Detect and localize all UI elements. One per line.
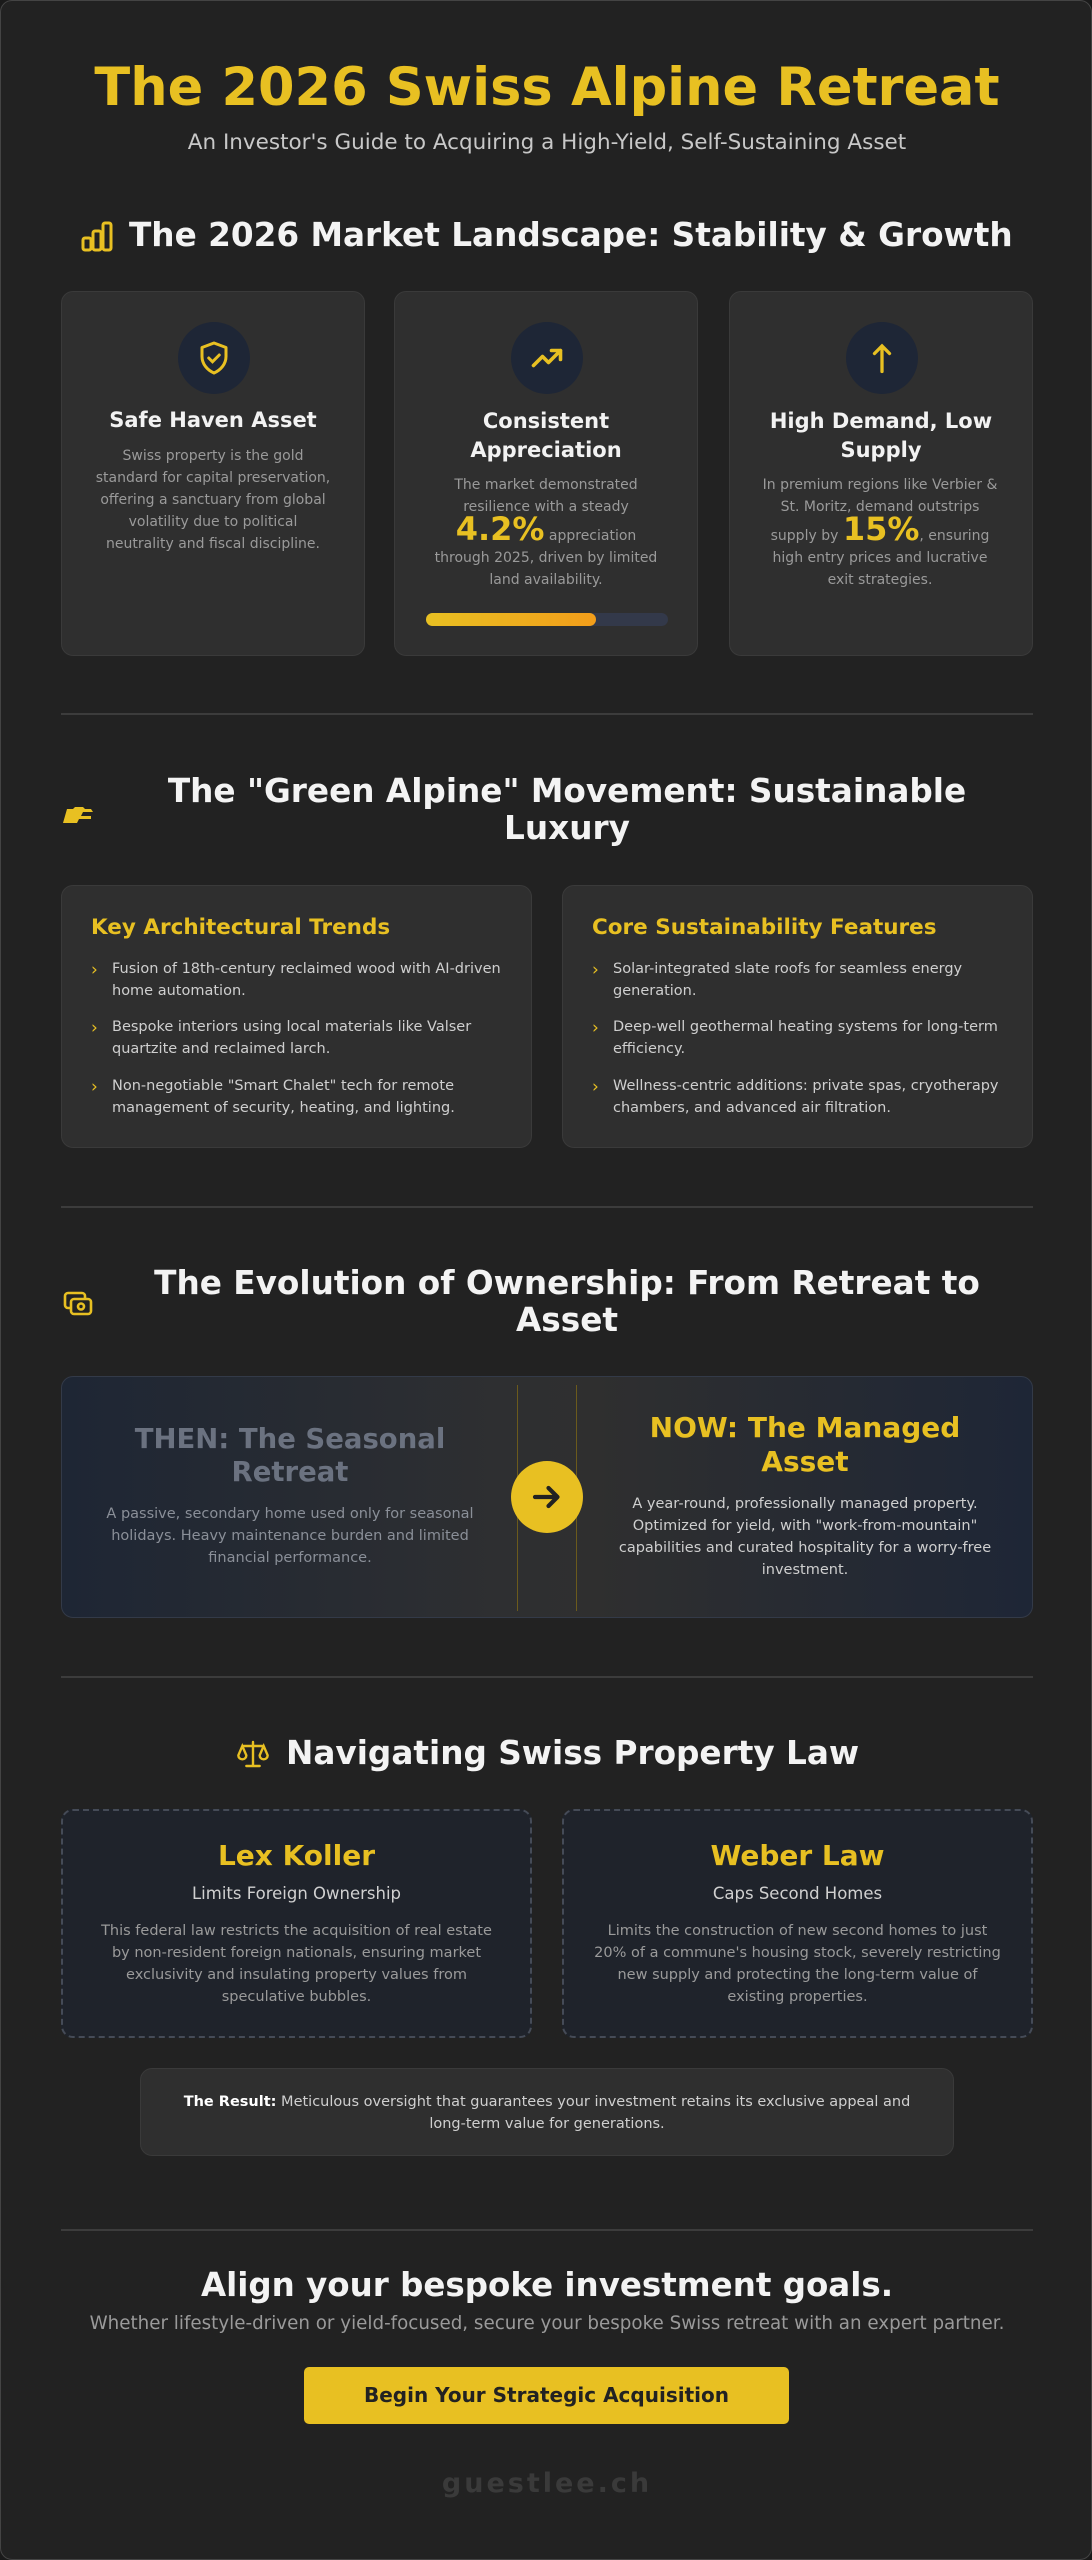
now: NOW: The Managed Asset (650, 1411, 960, 1478)
icon: arrow circle (511, 1461, 583, 1533)
section heading: evolution: Asset (516, 1301, 618, 1339)
section heading: evolution (64, 1264, 980, 1339)
panel: then vs now (61, 1376, 1033, 1618)
panel: sustainability features: Core Sustainability Features (592, 915, 937, 940)
section heading: green alpine: Luxury (504, 809, 630, 847)
card: safe haven (61, 291, 365, 656)
icon: shield (178, 322, 250, 394)
button (304, 2367, 789, 2424)
progress bar (426, 613, 668, 626)
card: demand: In premium regions like Verbier & St. Moritz, demand outstrips supply by 15%, ensuring high entry prices and lucrative exit strategies. (763, 477, 997, 588)
panel: sustainability features (562, 885, 1033, 1148)
icon: bar chart (82, 222, 112, 252)
section heading: green alpine: The "Green Alpine" Movement: Sustainable (168, 772, 966, 810)
icon: arrow up (846, 322, 918, 394)
section heading: market landscape: The 2026 Market Landscape: Stability & Growth (129, 216, 1013, 254)
panel: then vs now: A passive, secondary home used only for seasonal holidays. Heavy maintenance burden and limited financial performance. (106, 1506, 474, 1566)
card: safe haven: Swiss property is the gold standard for capital preservation, offering a sanctuary from global volatility due to political neutrality and fiscal discipline. (96, 448, 330, 552)
cta heading: Align your bespoke investment goals. (201, 2266, 893, 2304)
card: safe haven: Safe Haven Asset (109, 408, 317, 432)
panel: architectural trends: Non-negotiable "Smart Chalet" tech for remote management of security, heating, and lighting. (112, 1078, 455, 1116)
icon: trending up (511, 322, 583, 394)
card: weber law: Weber Law (710, 1839, 885, 1872)
footer brand: guestlee.ch (442, 2468, 652, 2499)
panel: then vs now: A year-round, professionally managed property. Optimized for yield, with "work-from-mountain" capabilities and curated hospitality for a worry-free investment. (619, 1496, 991, 1578)
panel: sustainability features: Deep-well geothermal heating systems for long-term efficiency. (613, 1019, 998, 1057)
panel: architectural trends: Bespoke interiors using local materials like Valser quartzite and reclaimed larch. (112, 1019, 471, 1057)
card: appreciation: Consistent Appreciation (470, 409, 622, 462)
panel: architectural trends (61, 885, 532, 1148)
section heading: green alpine (63, 772, 966, 847)
callout: result (140, 2068, 954, 2156)
panel: architectural trends: Key Architectural Trends (91, 915, 390, 940)
card: lex koller (61, 1809, 532, 2038)
title: The 2026 Swiss Alpine Retreat (94, 57, 1000, 118)
then: THEN: The Seasonal Retreat (135, 1423, 445, 1488)
card: lex koller: This federal law restricts the acquisition of real estate by non-resident foreign nationals, ensuring market exclusivity and insulating property values from speculative bubbles. (101, 1923, 492, 2005)
section heading: evolution: The Evolution of Ownership: From Retreat to (154, 1264, 980, 1302)
card: lex koller: Limits Foreign Ownership (192, 1884, 401, 1903)
icon: money (64, 1292, 92, 1316)
cta subtitle: Whether lifestyle-driven or yield-focused, secure your bespoke Swiss retreat with an expert partner. (90, 2313, 1004, 2334)
icon: scales (237, 1740, 269, 1768)
card: appreciation (394, 291, 698, 656)
card: weber law (562, 1809, 1033, 2038)
icon: chalet (63, 807, 93, 823)
card: demand: High Demand, Low Supply (770, 409, 992, 462)
card: lex koller: Lex Koller (218, 1839, 375, 1872)
button: Begin Your Strategic Acquisition (364, 2383, 729, 2407)
section heading: law: Navigating Swiss Property Law (286, 1734, 859, 1772)
panel: architectural trends: Fusion of 18th-century reclaimed wood with AI-driven home automation. (112, 961, 501, 999)
panel: sustainability features: Solar-integrated slate roofs for seamless energy generation. (613, 961, 962, 999)
callout: result: The Result: Meticulous oversight that guarantees your investment retains its exclusive appeal and long-term value for generations. (184, 2094, 910, 2132)
card: appreciation: The market demonstrated resilience with a steady 4.2% appreciation through 2025, driven by limited land availability. (435, 477, 657, 588)
panel: sustainability features: Wellness-centric additions: private spas, cryotherapy chambers, and advanced air filtration. (613, 1078, 999, 1116)
card: weber law: Caps Second Homes (713, 1884, 882, 1903)
card: demand (729, 291, 1033, 656)
card: weber law: Limits the construction of new second homes to just 20% of a commune's housing stock, severely restricting new supply and protecting the long-term value of existing properties. (594, 1923, 1001, 2005)
subtitle: An Investor's Guide to Acquiring a High-Yield, Self-Sustaining Asset (188, 130, 906, 155)
